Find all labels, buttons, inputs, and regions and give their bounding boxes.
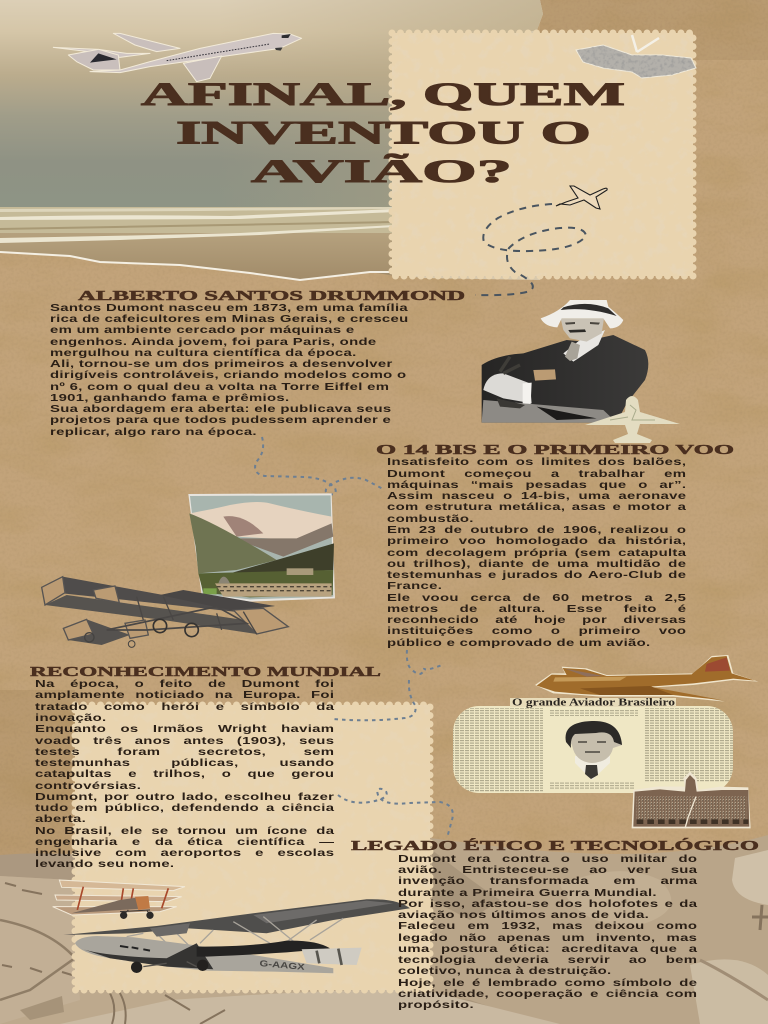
text block: ethical legacy bbox=[398, 854, 698, 1011]
text block: world recognition: tudo em público, defendendo a ciência bbox=[35, 803, 334, 814]
text block: world recognition: inovação. bbox=[35, 713, 107, 724]
icon: moth bbox=[576, 35, 696, 78]
illustration: large airliner biplane bbox=[63, 899, 410, 973]
title: AFINAL, QUEM bbox=[141, 77, 625, 113]
text block: 14 Bis first flight: Em 23 de outubro de 1906, realizou o bbox=[387, 525, 686, 536]
text block: world recognition: aberta. bbox=[35, 814, 86, 825]
text block: 14 Bis first flight: primeiro voo homologado da história, bbox=[387, 536, 686, 547]
newspaper clipping bbox=[453, 698, 733, 793]
text block: ethical legacy: aviação nos últimos anos de vida. bbox=[398, 910, 649, 921]
icon: map-textured plane bbox=[585, 396, 680, 443]
icon: small plane outline bbox=[556, 186, 607, 209]
text block: ethical legacy: coletivo, nunca à destruição. bbox=[398, 966, 611, 977]
text block: ethical legacy: tecnologia deveria servir ao bem bbox=[398, 955, 697, 966]
photo: alpine valley postcard bbox=[188, 493, 335, 602]
text block: world recognition bbox=[35, 679, 334, 870]
text block: Santos Dumont biography bbox=[50, 303, 409, 438]
newspaper headline: O grande Aviador Brasileiro bbox=[512, 698, 675, 708]
illustration: vintage biplane bbox=[42, 577, 288, 647]
text block: ethical legacy: Faleceu em 1932, mas deixou como bbox=[398, 921, 697, 932]
text block: Santos Dumont biography: projetos para que todos pudessem aprender e bbox=[50, 415, 391, 426]
title bbox=[141, 77, 625, 190]
portrait in newspaper bbox=[566, 721, 622, 780]
text block: Santos Dumont biography: mergulhou na cultura científica da época. bbox=[50, 348, 357, 359]
title: AVIÃO? bbox=[251, 153, 512, 190]
text block: 14 Bis first flight: Ele voou cerca de 60 metros a 2,5 bbox=[387, 593, 686, 604]
text block: 14 Bis first flight: France. bbox=[387, 581, 442, 592]
text block: 14 Bis first flight: com estrutura metálica, asas e motor a bbox=[387, 502, 686, 513]
text block: Santos Dumont biography: rica de cafeicultores em Minas Gerais, e cresceu bbox=[50, 314, 409, 325]
text block: world recognition: testes foram secretos, sem bbox=[35, 747, 334, 758]
icon: jet airliner bbox=[53, 33, 302, 82]
text block: Santos Dumont biography: engenhos. Ainda jovem, foi para Paris, onde bbox=[50, 337, 377, 348]
arrow: dotted path to recognition panel bbox=[333, 650, 442, 720]
text block: world recognition: engenharia e da ética científica — bbox=[35, 837, 334, 848]
text block: world recognition: controvérsias. bbox=[35, 781, 141, 792]
text block: ethical legacy: invenção transformada em arma bbox=[398, 876, 697, 887]
text block: world recognition: No Brasil, ele se tornou um ícone da bbox=[35, 826, 334, 837]
text block: Santos Dumont biography: Santos Dumont nasceu em 1873, em uma família bbox=[50, 303, 408, 314]
text block: 14 Bis first flight: reconhecido até hoje por diversas bbox=[387, 615, 686, 626]
stamp panel: recognition backing bbox=[75, 705, 430, 990]
text block: world recognition: tratado como herói e símbolo da bbox=[35, 702, 334, 713]
text block: ethical legacy: legado não apenas um invento, mas bbox=[398, 933, 697, 944]
photo: Santos Dumont in hat bbox=[482, 300, 648, 423]
arrow: dotted path to legacy heading bbox=[338, 789, 453, 838]
illustration: B-17 bomber bbox=[535, 655, 758, 702]
text block: ethical legacy: avião. Entristeceu-se ao ver sua bbox=[398, 865, 697, 876]
text block: world recognition: testemunhas públicas, usando bbox=[35, 758, 334, 769]
text block: 14 Bis first flight: testemunhas e jurados do Aero-Club de bbox=[387, 570, 686, 581]
text block: ethical legacy: Por isso, afastou-se dos holofotes e da bbox=[398, 899, 697, 910]
arrow: dotted path to 14 Bis bbox=[255, 437, 383, 494]
text block: 14 Bis first flight bbox=[387, 457, 686, 649]
text block: 14 Bis first flight: Insatisfeito com os limites dos balões, bbox=[387, 457, 686, 468]
text block: Santos Dumont biography: em um ambiente cercado por máquinas e bbox=[50, 325, 355, 336]
text block: ethical legacy: durante a Primeira Guerra Mundial. bbox=[398, 888, 657, 899]
illustration: red triplane bbox=[53, 880, 185, 919]
text block: world recognition: voado três anos antes (1903), seus bbox=[35, 736, 334, 747]
text block: 14 Bis first flight: Dumont começou a trabalhar em bbox=[387, 469, 686, 480]
text block: world recognition: catapultas e trilhos, o que gerou bbox=[35, 769, 334, 780]
text block: Santos Dumont biography: 1901, ganhando fama e prêmios. bbox=[50, 393, 289, 404]
text block: 14 Bis first flight: combustão. bbox=[387, 514, 474, 525]
text block: 14 Bis first flight: Assim nasceu o 14-bis, uma aeronave bbox=[387, 491, 686, 502]
text block: 14 Bis first flight: ou trilhos), diante de uma multidão de bbox=[387, 559, 686, 570]
text block: 14 Bis first flight: público e comprovado de um avião. bbox=[387, 638, 651, 649]
arrow: dashed flight path from small plane bbox=[475, 204, 586, 295]
text block: Santos Dumont biography: replicar, algo raro na época. bbox=[50, 427, 257, 438]
text block: 14 Bis first flight: instituições como o primeiro voo bbox=[387, 626, 686, 637]
text block: world recognition: Dumont, por outro lado, escolheu fazer bbox=[35, 792, 334, 803]
heading: 14 Bis: O 14 BIS E O PRIMEIRO VOO bbox=[376, 443, 734, 458]
top collage photo: sky and beach bbox=[0, 0, 545, 283]
text block: 14 Bis first flight: metros de altura. Esse feito é bbox=[387, 604, 686, 615]
map: bottom area bbox=[0, 835, 768, 1024]
heading: Alberto Santos Drummond: ALBERTO SANTOS DRUMMOND bbox=[78, 289, 465, 304]
text block: ethical legacy: criatividade, cooperação e ciência com bbox=[398, 989, 697, 1000]
text block: 14 Bis first flight: com decolagem própria (sem catapulta bbox=[387, 548, 686, 559]
title: INVENTOU O bbox=[176, 116, 591, 152]
stamp panel: title backing bbox=[392, 33, 693, 276]
text block: ethical legacy: Hoje, ele é lembrado como símbolo de bbox=[398, 978, 697, 989]
illustration: large airliner biplane: G-AAGX bbox=[259, 958, 305, 972]
heading: Legado Etico e Tecnologico: LEGADO ÉTICO E TECNOLÓGICO bbox=[351, 837, 759, 854]
text block: ethical legacy: propósito. bbox=[398, 1000, 474, 1011]
text block: Santos Dumont biography: nº 6, com o qual deu a volta na Torre Eiffel em bbox=[50, 382, 389, 393]
text block: 14 Bis first flight: máquinas “mais pesadas que o ar”. bbox=[387, 480, 686, 491]
text block: world recognition: levando seu nome. bbox=[35, 859, 174, 870]
text block: world recognition: Enquanto os Irmãos Wright haviam bbox=[35, 724, 334, 735]
text block: Santos Dumont biography: Sua abordagem era aberta: ele publicava seus bbox=[50, 404, 392, 415]
text block: ethical legacy: uma postura ética: acreditava que a bbox=[398, 944, 697, 955]
text block: world recognition: amplamente noticiado na Europa. Foi bbox=[35, 690, 334, 701]
text block: world recognition: inclusive com aeroportos e escolas bbox=[35, 848, 334, 859]
text block: ethical legacy: Dumont era contra o uso militar do bbox=[398, 854, 697, 865]
heading: Reconhecimento Mundial: RECONHECIMENTO MUNDIAL bbox=[30, 665, 381, 680]
text block: world recognition: Na época, o feito de Dumont foi bbox=[35, 679, 334, 690]
illustration: palace building bbox=[632, 772, 751, 828]
text block: Santos Dumont biography: dirigíveis controláveis, criando modelos como o bbox=[50, 370, 406, 381]
text block: Santos Dumont biography: Ali, tornou-se um dos primeiros a desenvolver bbox=[50, 359, 393, 370]
